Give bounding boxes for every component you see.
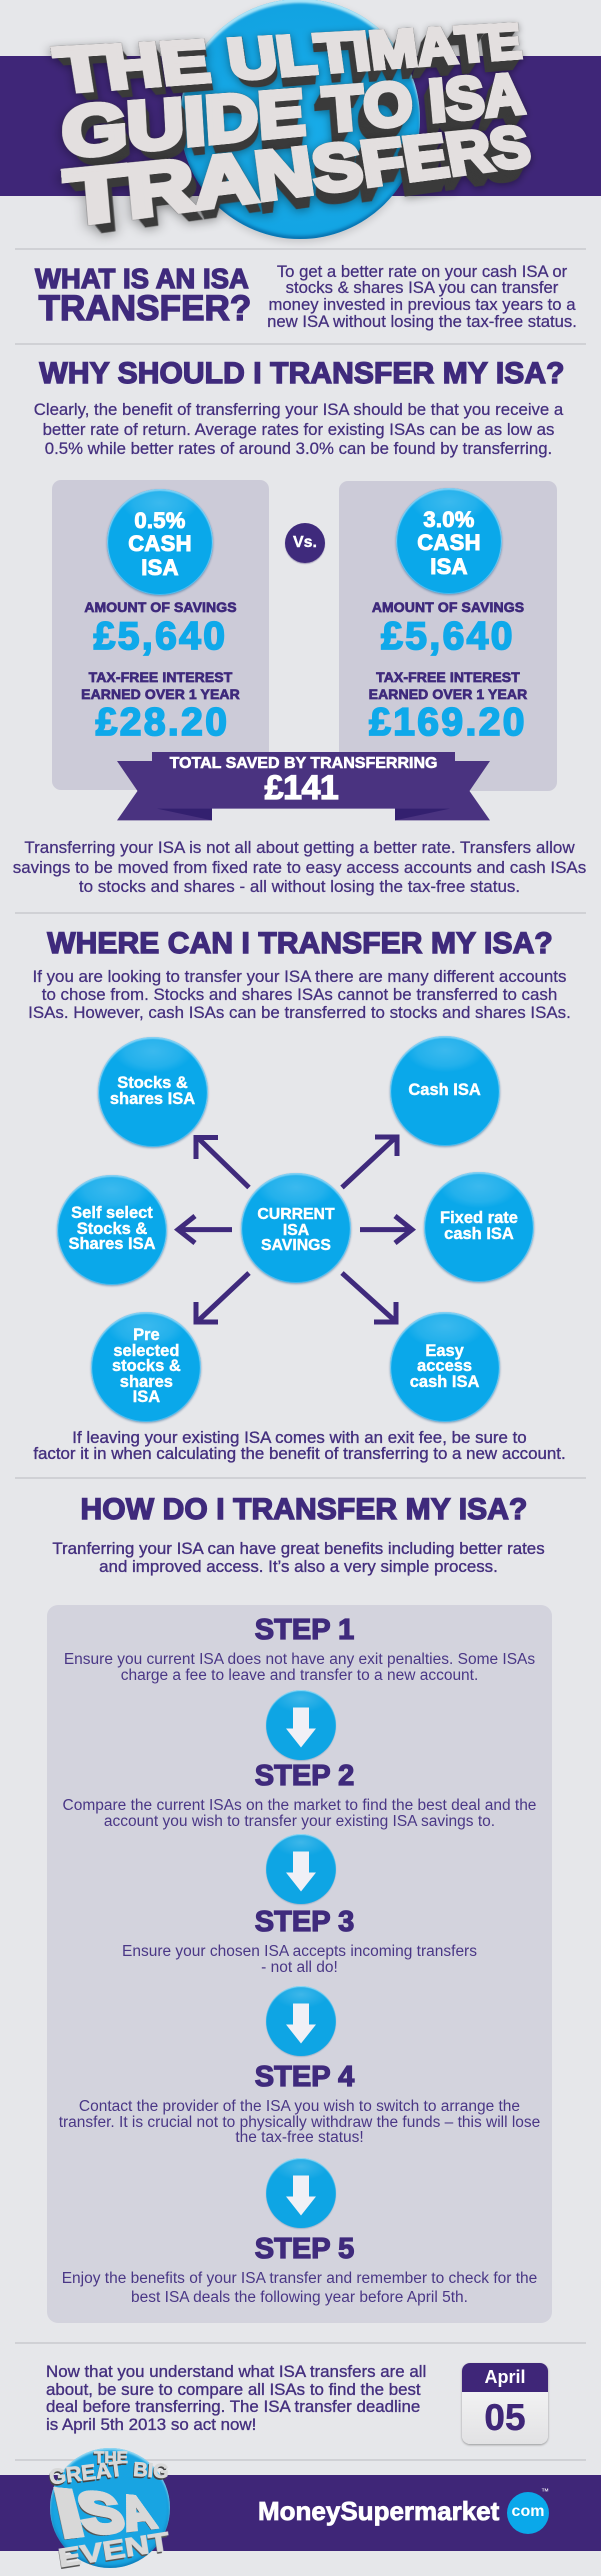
text: what is an ISA transfer: money invested in previous tax years to a	[268, 295, 576, 314]
logo: com badge: com	[512, 2503, 544, 2520]
circle: pre selected: shares	[120, 1373, 173, 1391]
circle: cash ISA	[390, 1036, 500, 1146]
label: total saved: TOTAL SAVED BY TRANSFERRING	[170, 755, 437, 772]
badge: 0.5% cash ISA	[107, 489, 213, 595]
step 2 text: account you wish to transfer your existing ISA savings to.	[104, 1812, 495, 1830]
text: other transfer benefits	[13, 838, 586, 896]
badge: versus	[285, 522, 325, 562]
circle: pre selected: Pre	[133, 1326, 160, 1344]
text: why transfer intro: better rate of return. Average rates for existing ISAs can be as low as	[43, 420, 554, 439]
text: what is an ISA transfer: To get a better rate on your cash ISA or	[277, 262, 567, 281]
text: how intro: Tranferring your ISA can have great benefits including better rates	[52, 1539, 545, 1558]
value: interest: £169.20	[369, 701, 527, 744]
purple header band	[0, 56, 601, 196]
step 3 text: Ensure your chosen ISA accepts incoming transfers	[122, 1943, 477, 1960]
badge: 3.0% cash ISA	[396, 488, 502, 594]
text: closing call to action: deal before transferring. The ISA transfer deadline	[46, 2397, 420, 2416]
circle: self select	[57, 1175, 167, 1285]
step 2 text: Compare the current ISAs on the market to find the best deal and the	[63, 1797, 536, 1814]
text: why transfer intro: 0.5% while better rates of around 3.0% can be found by transferring.	[45, 439, 552, 458]
step 2 text	[63, 1797, 536, 1830]
logo: MoneySupermarket: MoneySupermarket	[258, 2496, 499, 2526]
badge: 0.5% cash ISA: ISA	[141, 555, 179, 580]
logo word: big: BIG	[132, 2459, 170, 2483]
circle: stocks and shares ISA	[98, 1037, 208, 1147]
badge: 3.0% cash ISA: ISA	[430, 554, 468, 579]
text: why transfer intro: Clearly, the benefit of transferring your ISA should be that you receive a	[34, 400, 563, 419]
step 5 text: best ISA deals the following year before April 5th.	[131, 2289, 468, 2306]
calendar day: 05	[484, 2397, 526, 2438]
diagram: transfer options	[56, 1036, 536, 1424]
title: three extruded lines: TRANSFERS	[63, 114, 535, 243]
label: amount of savings: AMOUNT OF SAVINGS	[372, 599, 524, 615]
step 1 text	[64, 1651, 535, 1684]
text: other transfer benefits: to stocks and shares - all without losing the tax-free status.	[79, 877, 520, 896]
title: three extruded lines: THE ULTIMATE	[51, 14, 524, 106]
step 3 heading: STEP 3	[255, 1906, 354, 1938]
value: interest: £28.20	[96, 701, 229, 744]
panel: 3.0% cash ISA	[339, 481, 557, 791]
text: other transfer benefits: savings to be moved from fixed rate to easy access accounts and cash ISAs	[13, 858, 586, 876]
step 4 heading: STEP 4	[255, 2061, 354, 2093]
circle: fixed rate cash ISA: cash ISA	[444, 1225, 514, 1243]
circle: easy access: access	[417, 1357, 472, 1375]
text: where intro: ISAs. However, cash ISAs can be transferred to stocks and shares ISAs.	[28, 1003, 571, 1022]
value: savings: £5,640	[381, 615, 515, 658]
text: exit fee note: factor it in when calculating the benefit of transferring to a new account.	[33, 1444, 566, 1463]
badge: 0.5% cash ISA: 0.5%	[134, 508, 186, 533]
circle: cash ISA: Cash ISA	[408, 1081, 481, 1099]
calendar month: April	[484, 2367, 526, 2387]
panel: 0.5% cash ISA	[52, 480, 269, 790]
circle: stocks and shares ISA: Stocks &	[117, 1074, 188, 1092]
badge: 3.0% cash ISA: 3.0%	[423, 507, 475, 532]
ribbon: total saved	[117, 752, 490, 820]
text: what is an ISA transfer: new ISA without losing the tax-free status.	[267, 312, 577, 331]
badge: versus: Vs.	[293, 534, 317, 550]
logo word: event: EVENT	[56, 2528, 171, 2573]
step 4 text: Contact the provider of the ISA you wish to switch to arrange the	[79, 2098, 520, 2115]
logo circle	[50, 2448, 170, 2568]
heading: how do I transfer: HOW DO I TRANSFER MY ISA?	[81, 1493, 527, 1526]
label: interest earned: EARNED OVER 1 YEAR	[369, 686, 527, 702]
text: where intro	[28, 967, 571, 1022]
title: three extruded lines: THE ULTIMATE	[51, 14, 524, 106]
label: interest earned: TAX-FREE INTEREST	[376, 669, 520, 685]
label: amount of savings: AMOUNT OF SAVINGS	[84, 599, 237, 615]
glossy blue title circle	[180, 0, 420, 239]
circle: self select: Self select	[71, 1204, 153, 1222]
circle: pre selected: selected	[113, 1342, 179, 1360]
step 4 text: transfer. It is crucial not to physically withdraw the funds – this will lose	[59, 2114, 540, 2130]
trademark: ™	[541, 2487, 549, 2496]
step 5 text: Enjoy the benefits of your ISA transfer and remember to check for the	[62, 2270, 537, 2287]
icon: calendar April 05	[462, 2363, 548, 2444]
title: three extruded lines: GUIDE TO ISA	[60, 62, 527, 173]
circle: easy access: Easy	[425, 1342, 464, 1360]
title: three extruded lines: GUIDE TO ISA	[60, 62, 527, 173]
circle: easy access: cash ISA	[410, 1373, 479, 1391]
panel: steps	[47, 1605, 552, 2323]
label: interest earned: EARNED OVER 1 YEAR	[81, 686, 240, 702]
icon: down arrow	[266, 1690, 336, 1760]
circle: pre selected: stocks &	[112, 1357, 181, 1375]
text: how intro	[52, 1539, 545, 1576]
icon: down arrow	[266, 1834, 336, 1904]
circle: fixed rate cash ISA: Fixed rate	[440, 1209, 518, 1227]
heading: what is an ISA transfer: WHAT IS AN ISA	[35, 263, 249, 294]
heading: what is an ISA transfer	[34, 263, 251, 328]
arrows from centre to options	[174, 1134, 416, 1324]
text: closing call to action: is April 5th 2013 so act now!	[46, 2415, 256, 2434]
text: exit fee note: If leaving your existing ISA comes with an exit fee, be sure to	[72, 1428, 527, 1447]
heading: what is an ISA transfer: TRANSFER?	[39, 289, 251, 328]
step 1 text: Ensure you current ISA does not have any exit penalties. Some ISAs	[64, 1651, 535, 1668]
circle: self select: Shares ISA	[68, 1235, 156, 1253]
calendar month	[462, 2363, 548, 2392]
circle: current ISA savings: CURRENT	[257, 1206, 335, 1223]
step 4 text: the tax-free status!	[235, 2129, 364, 2146]
label: interest earned: TAX-FREE INTEREST	[89, 669, 232, 685]
step 1 heading: STEP 1	[255, 1614, 354, 1646]
logo word: ISA: ISA	[49, 2477, 162, 2553]
logo: the great big ISA event	[48, 2448, 171, 2573]
text: where intro: If you are looking to transfer your ISA there are many different accounts	[33, 967, 566, 986]
label: interest earned	[81, 669, 240, 702]
footer band	[0, 2475, 601, 2551]
text: closing call to action: about, be sure to compare all ISAs to find the best	[46, 2380, 421, 2399]
icon: down arrow	[266, 1986, 336, 2056]
text: what is an ISA transfer: stocks & shares ISA you can transfer	[286, 278, 558, 297]
circle: fixed rate cash ISA	[424, 1172, 534, 1282]
badge: 0.5% cash ISA: CASH	[128, 531, 192, 556]
title: three extruded lines	[44, 14, 535, 243]
value: savings: £5,640	[94, 615, 227, 658]
text: how intro: and improved access. It’s also a very simple process.	[99, 1557, 498, 1576]
text: why transfer intro	[34, 400, 564, 458]
text: other transfer benefits: Transferring your ISA is not all about getting a better rate. Transfers allow	[24, 838, 575, 857]
logo: com badge	[507, 2492, 549, 2534]
circle: self select: Stocks &	[77, 1220, 147, 1238]
title: three extruded lines: TRANSFERS	[63, 114, 535, 243]
circle: pre selected	[91, 1312, 201, 1422]
circle: pre selected: ISA	[133, 1388, 160, 1406]
step 4 text	[59, 2098, 540, 2146]
circle: current ISA savings	[241, 1173, 351, 1283]
badge: 3.0% cash ISA: CASH	[417, 530, 481, 555]
step 1 text: charge a fee to leave and transfer to a new account.	[121, 1666, 478, 1684]
circle: easy access	[390, 1312, 500, 1422]
logo word: great: GREAT	[48, 2457, 124, 2489]
text: closing call to action	[46, 2362, 426, 2434]
text: what is an ISA transfer	[267, 262, 577, 331]
text: closing call to action: Now that you understand what ISA transfers are all	[46, 2362, 426, 2381]
icon: down arrow	[266, 2158, 336, 2228]
text: exit fee note	[33, 1428, 566, 1463]
heading: where can I transfer: WHERE CAN I TRANSFER MY ISA?	[47, 927, 553, 960]
step 5 text	[62, 2270, 537, 2306]
step 5 heading: STEP 5	[255, 2233, 354, 2265]
circle: current ISA savings: SAVINGS	[261, 1237, 331, 1254]
step 3 text: - not all do!	[261, 1959, 338, 1976]
step 2 heading: STEP 2	[255, 1760, 354, 1792]
value: total saved: £141	[265, 769, 338, 807]
label: interest earned	[369, 669, 528, 702]
heading: why should I transfer: WHY SHOULD I TRANSFER MY ISA?	[39, 357, 565, 390]
step 3 text	[122, 1943, 477, 1976]
text: where intro: to chose from. Stocks and shares ISAs cannot be transferred to cash	[42, 985, 557, 1004]
logo word: the: THE	[94, 2448, 128, 2466]
circle: current ISA savings: ISA	[283, 1222, 309, 1239]
circle: stocks and shares ISA: shares ISA	[110, 1090, 195, 1108]
